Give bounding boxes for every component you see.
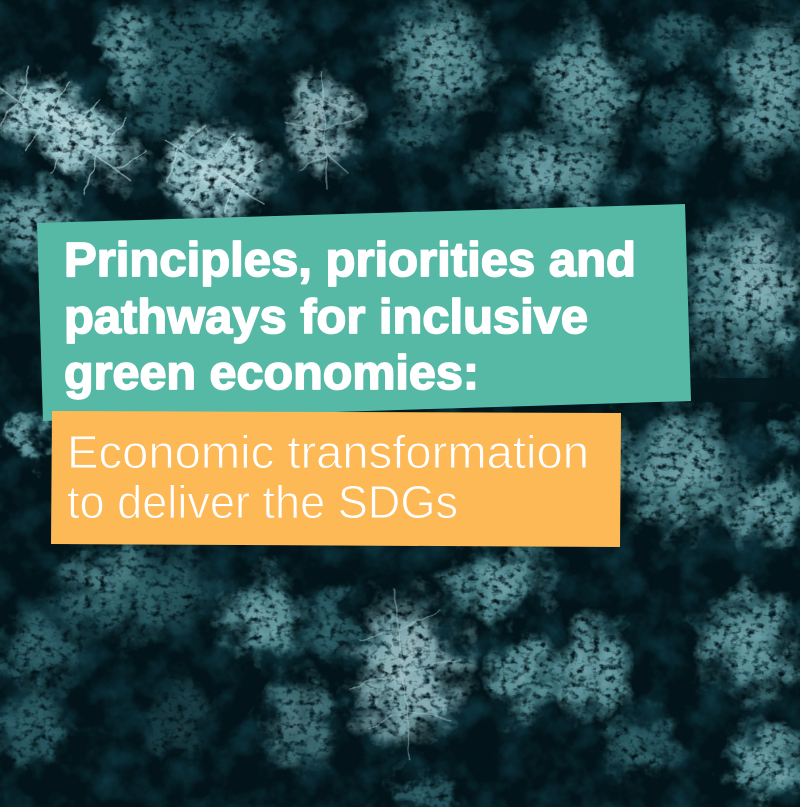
orange subtitle panel (51, 411, 621, 547)
title text: pathways for inclusive (64, 291, 588, 344)
title text: green economies: (64, 347, 479, 400)
title text: Principles, priorities and (64, 234, 636, 287)
teal title panel (37, 204, 691, 421)
subtitle text: to deliver the SDGs (67, 476, 458, 528)
title text (64, 234, 636, 400)
subtitle text: Economic transformation (67, 426, 589, 478)
subtitle text (67, 426, 589, 528)
